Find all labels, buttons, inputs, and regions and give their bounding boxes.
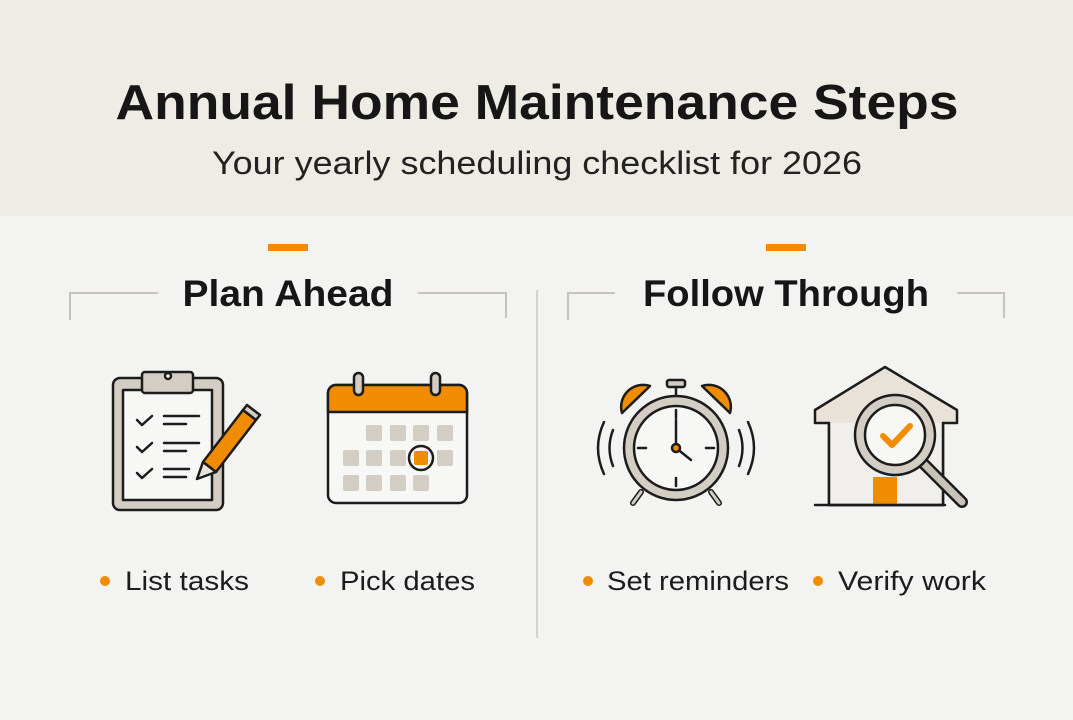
- panel: follow through: [568, 244, 1004, 596]
- subtitle: Your yearly scheduling checklist for 2026: [212, 145, 862, 181]
- bullet: verify work: Verify work: [838, 566, 987, 596]
- title: Annual Home Maintenance Steps: [116, 76, 959, 130]
- icon: clipboard with pencil: [113, 372, 260, 510]
- icon: alarm clock: [598, 380, 754, 503]
- bullet: set reminders: Set reminders: [607, 566, 789, 596]
- icon: house with magnifier: [815, 367, 962, 505]
- icon: calendar: [328, 373, 467, 503]
- heading: plan ahead: Plan Ahead: [182, 273, 394, 314]
- panel: plan ahead: [70, 244, 506, 596]
- heading: follow through: Follow Through: [643, 273, 929, 314]
- header band: [0, 0, 1073, 216]
- bullet: list tasks: List tasks: [125, 566, 249, 596]
- bullet: pick dates: Pick dates: [340, 566, 475, 596]
